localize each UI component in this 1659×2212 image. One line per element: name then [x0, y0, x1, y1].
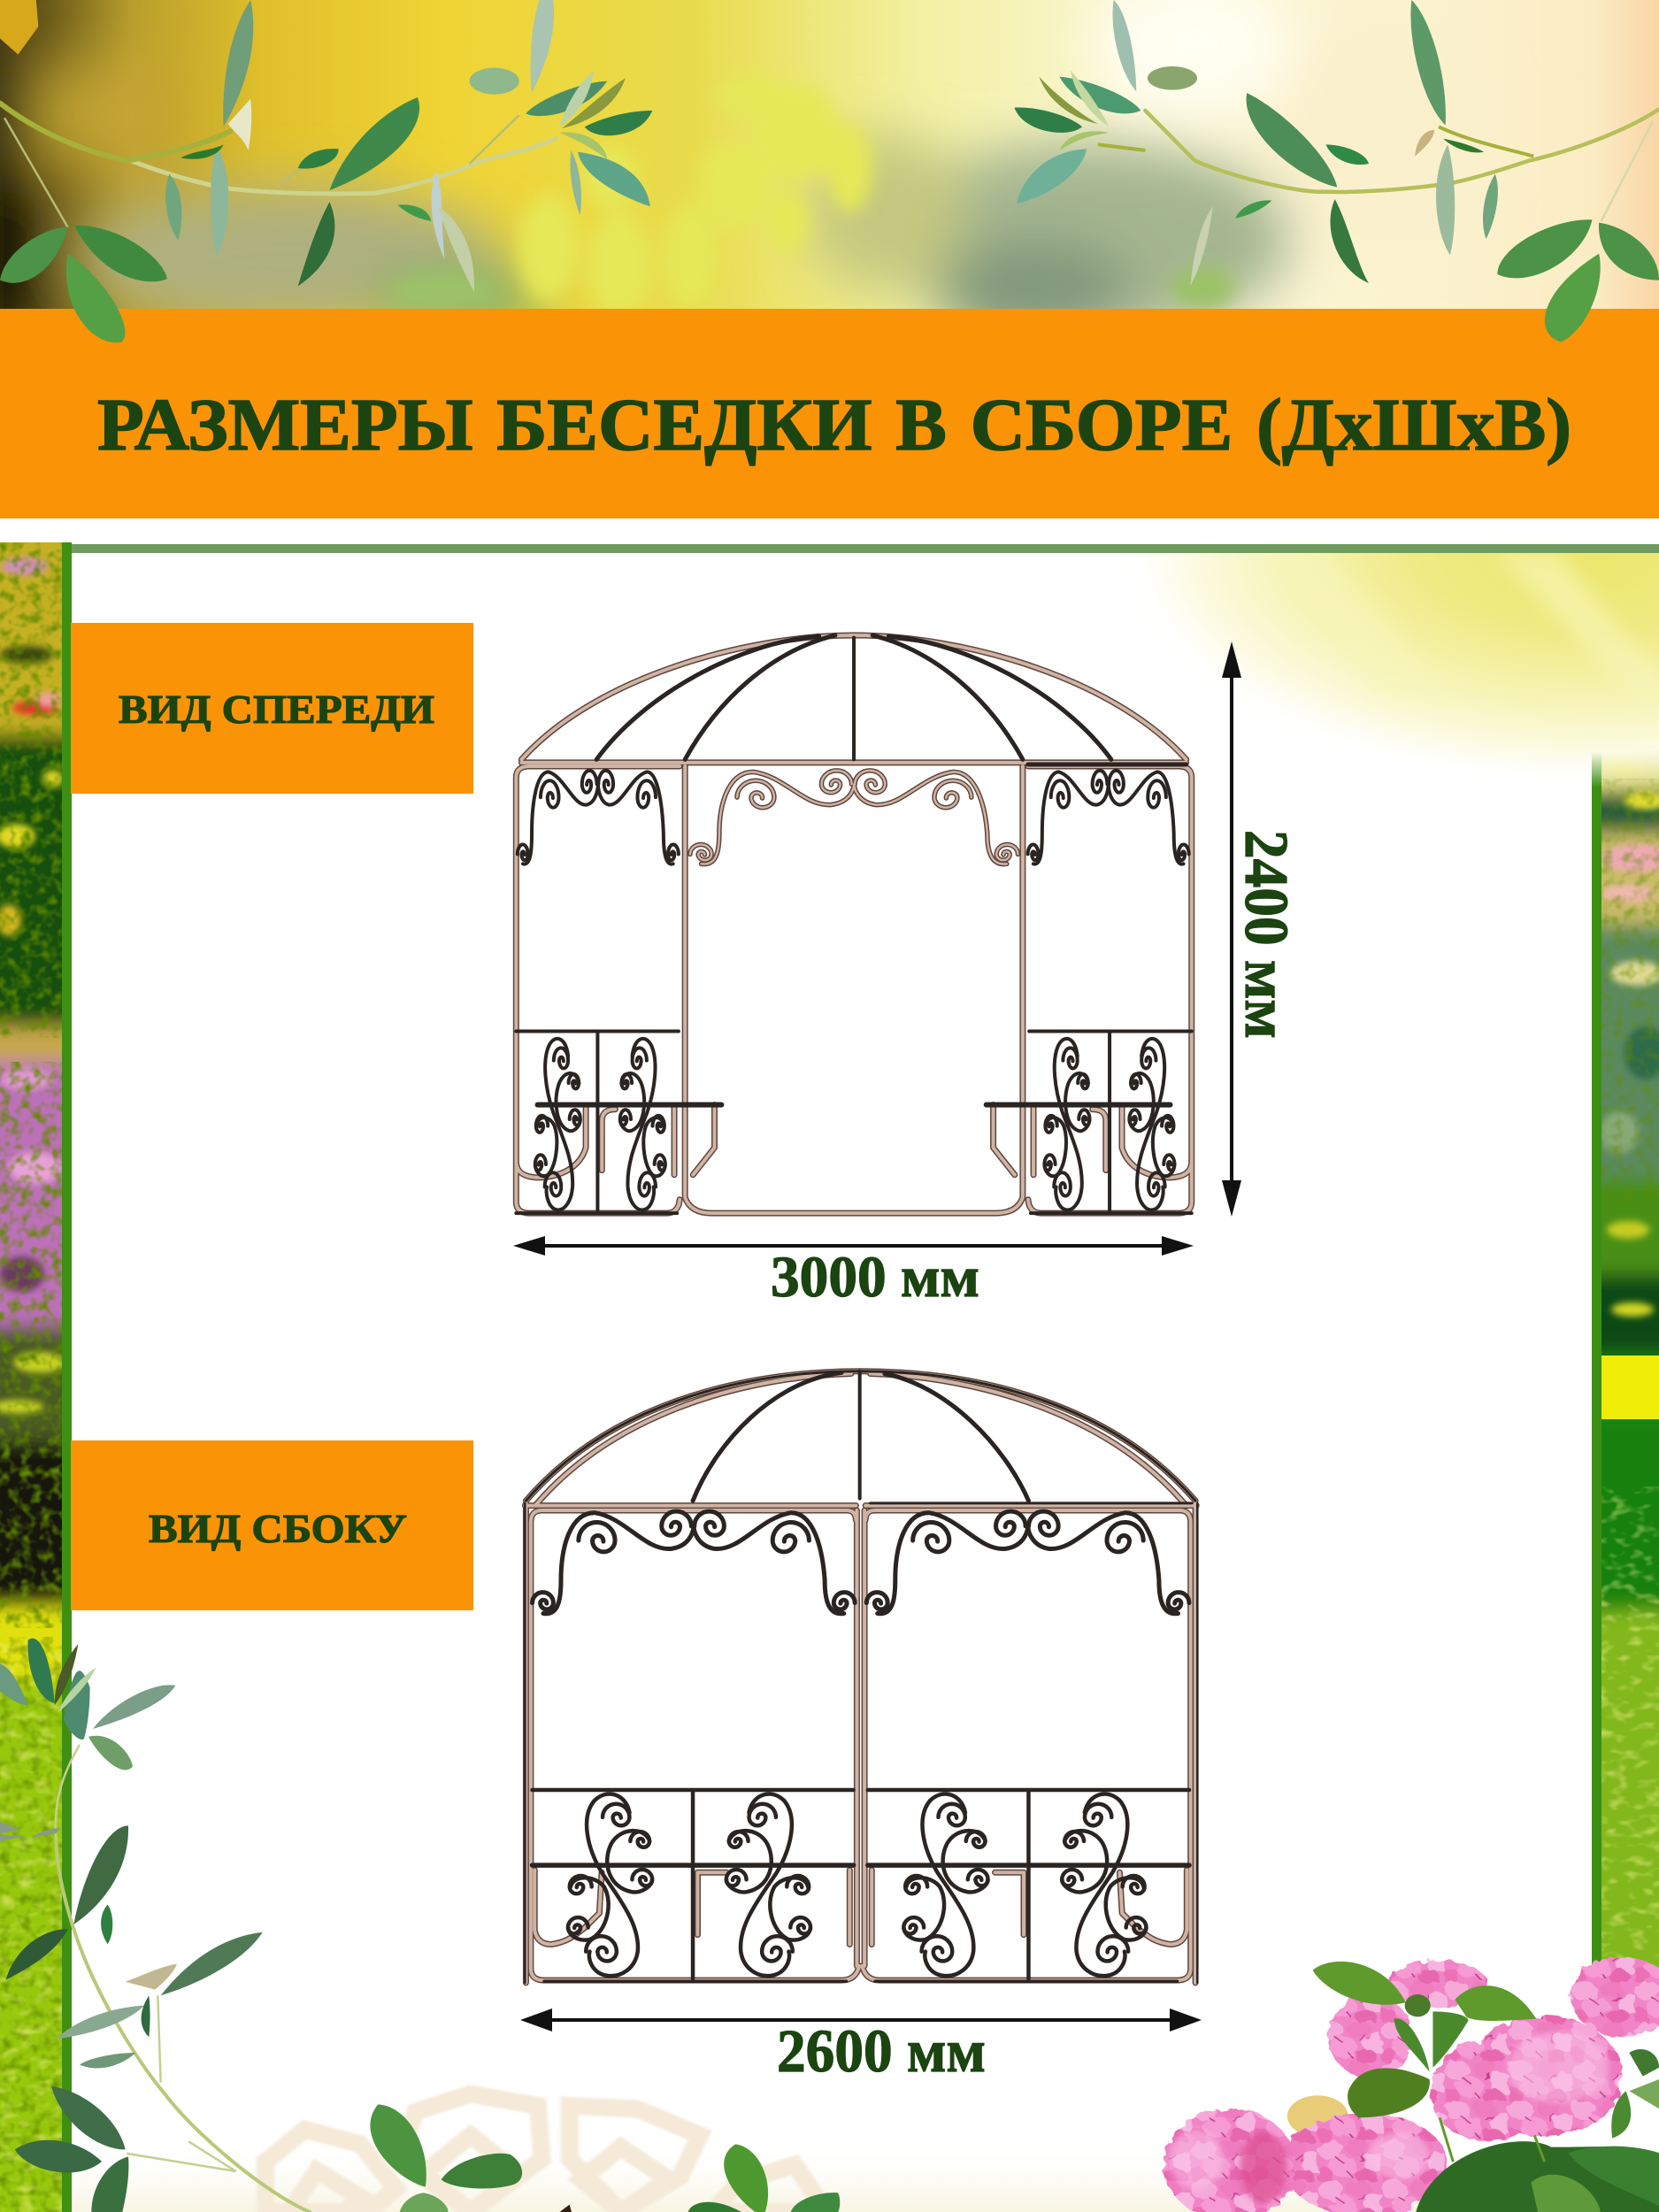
front view tube frame	[516, 635, 1192, 1213]
side view roof ribs	[525, 1371, 1197, 1983]
side view top ornaments	[533, 1511, 1189, 1614]
top-left yellow flower fragment	[0, 0, 38, 55]
left green stripe	[62, 542, 72, 2212]
label: side view	[71, 1440, 473, 1610]
dimension: 2600 mm: 2600 мм	[777, 2017, 986, 2085]
right photo strip	[1575, 717, 1659, 1982]
top photo band	[0, 0, 1659, 345]
deep pink shadow	[1240, 2132, 1287, 2203]
front view side ornaments	[518, 771, 1189, 864]
label: side view: ВИД СБОКУ	[149, 1506, 407, 1551]
cream floor fade	[72, 2141, 1659, 2212]
hydrangea flowers bottom right	[1164, 1957, 1659, 2212]
arrow: side width	[520, 2008, 1202, 2032]
drawing: gazebo front view	[516, 635, 1192, 1213]
branch: bottom left	[0, 1639, 310, 2212]
left photo strip	[0, 522, 88, 2212]
title banner	[0, 309, 1659, 518]
title: РАЗМЕРЫ БЕСЕДКИ В СБОРЕ (ДхШхВ)	[97, 384, 1571, 466]
green leaves	[1313, 1962, 1659, 2212]
light highlights	[1169, 2032, 1609, 2188]
horizontal green rule	[72, 544, 1659, 553]
front view centre ornament	[690, 771, 1018, 864]
arrow: height	[1222, 641, 1241, 1217]
drawing: gazebo side view	[525, 1371, 1197, 1983]
pale mandala pattern	[265, 2094, 826, 2212]
leaves: bottom centre	[370, 2104, 840, 2212]
front view lower grilles	[516, 1032, 1192, 1213]
branch: top right	[1014, 0, 1659, 342]
dimension: 2400 mm: 2400 мм	[1232, 830, 1300, 1039]
branch: top left	[0, 0, 652, 342]
right green stripe	[1592, 739, 1601, 1969]
dimension: 3000 mm: 3000 мм	[771, 1245, 979, 1310]
side view tube frame	[525, 1371, 1196, 1983]
sunlight rays top right of panel	[1097, 553, 1659, 805]
front view centre ornament highlight	[690, 771, 1018, 864]
arrow: front width	[513, 1236, 1194, 1256]
front view roof ribs	[596, 635, 1187, 764]
yellow bud	[1287, 2095, 1348, 2137]
label: front view: ВИД СПЕРЕДИ	[119, 687, 434, 732]
label: front view	[71, 623, 473, 794]
pink flower heads	[1164, 1957, 1659, 2212]
side view lower grilles	[532, 1790, 1189, 1981]
